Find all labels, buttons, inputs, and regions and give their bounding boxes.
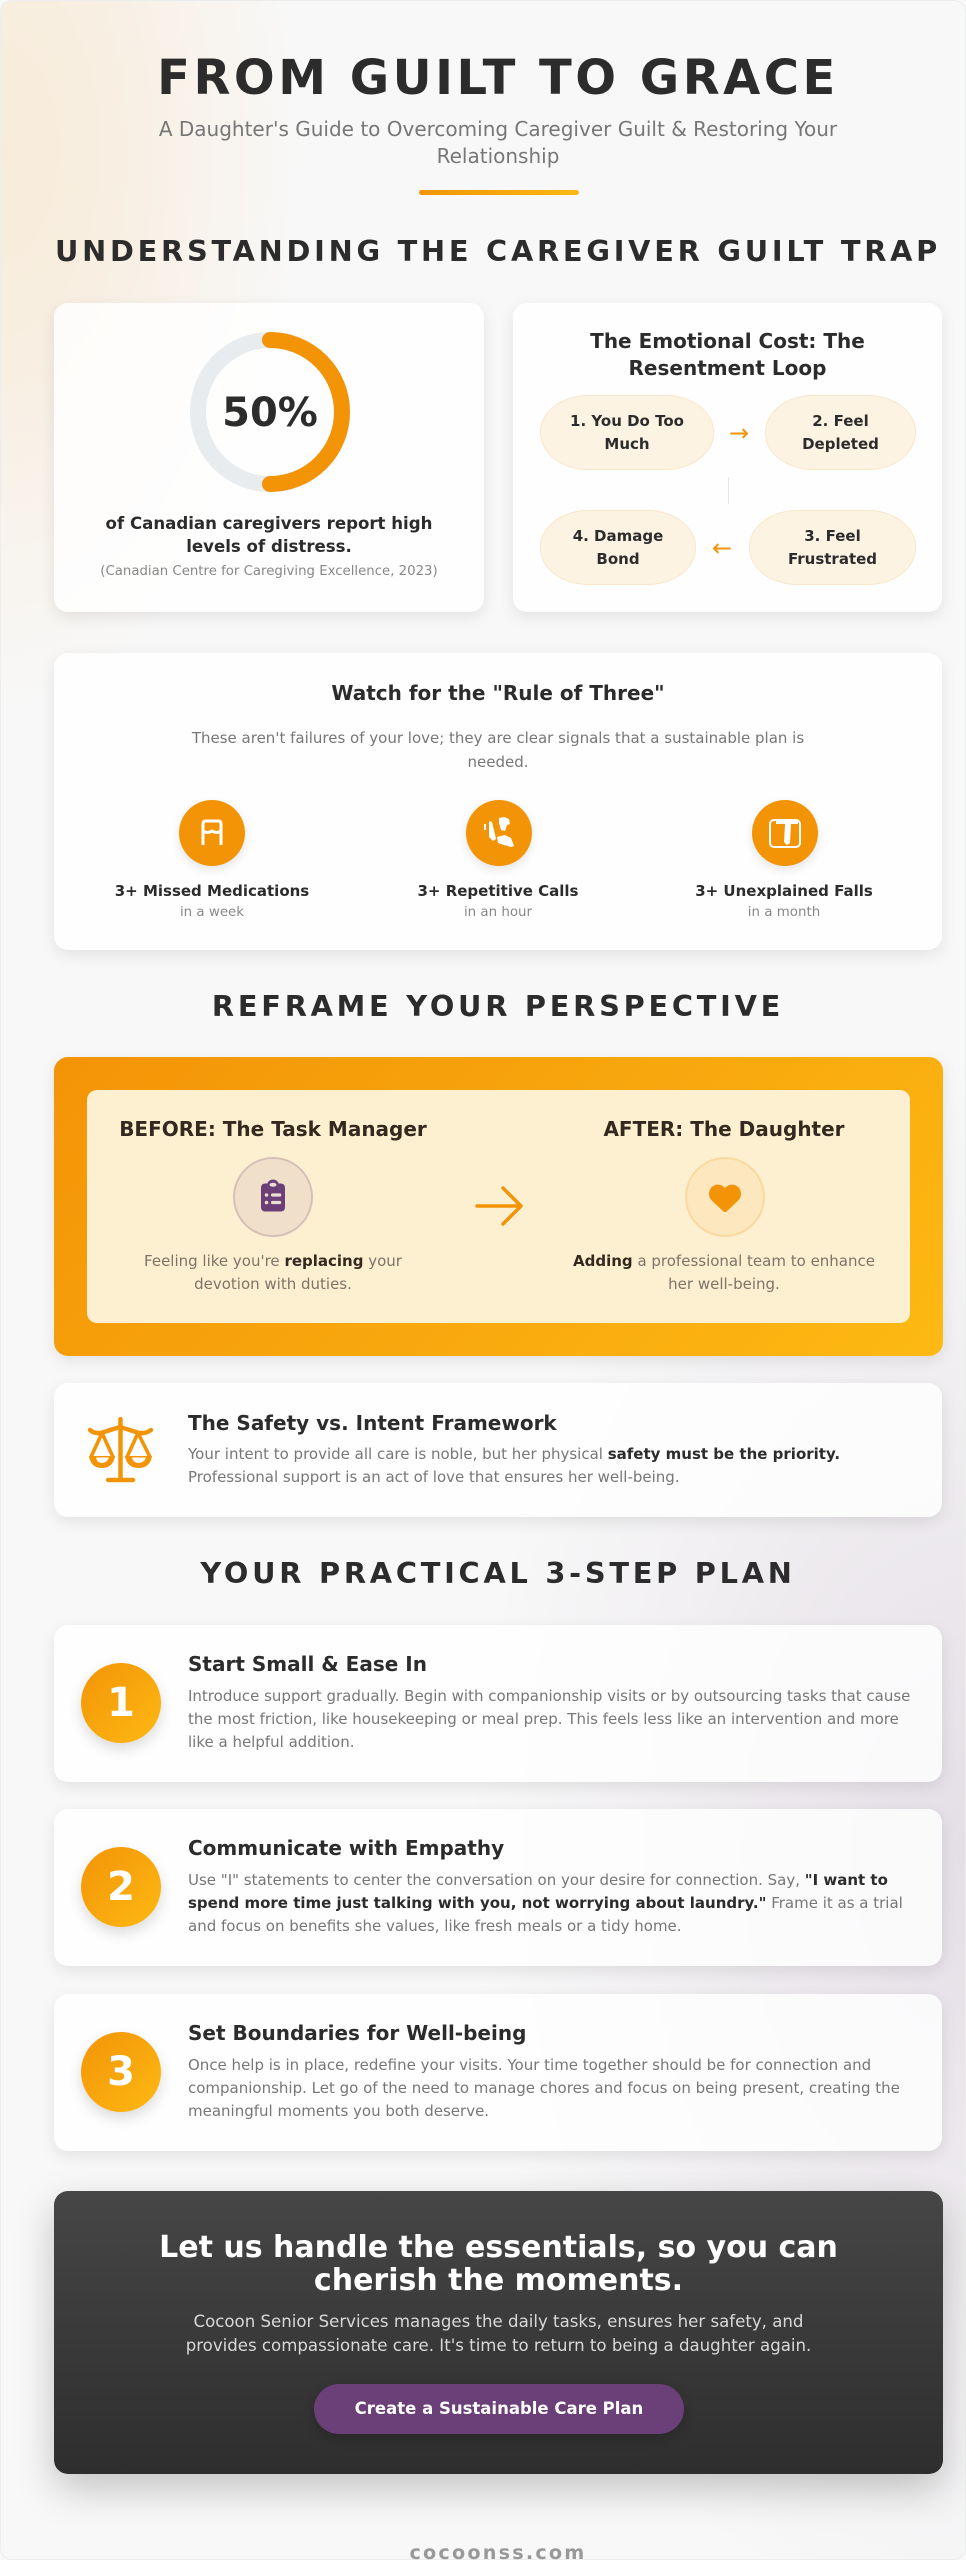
step 1 text: Introduce support gradually. Begin with companionship visits or by outsourcing tasks that cause xyxy=(188,1687,910,1705)
inner comparison box xyxy=(87,1090,910,1323)
rule description: needed. xyxy=(467,753,528,771)
heading: reframe your perspective: REFRAME YOUR PERSPECTIVE xyxy=(212,989,784,1023)
cta description xyxy=(186,2312,811,2354)
title: FROM GUILT TO GRACE xyxy=(157,50,839,106)
loop heading xyxy=(590,329,865,380)
panel: call to action xyxy=(54,2191,943,2474)
cta description: Cocoon Senior Services manages the daily tasks, ensures her safety, and xyxy=(194,2312,803,2331)
step 1 heading: Start Small & Ease In xyxy=(188,1652,427,1676)
node 2: Depleted xyxy=(802,435,879,453)
node 4: Bond xyxy=(596,550,640,568)
connector xyxy=(728,477,729,504)
after heading: AFTER: The Daughter xyxy=(603,1117,845,1141)
loop heading: Resentment Loop xyxy=(629,356,826,380)
safety description: Your intent to provide all care is noble, but her physical safety must be the priority. xyxy=(188,1445,840,1463)
icon: heart xyxy=(685,1157,765,1237)
rule description: These aren't failures of your love; they are clear signals that a sustainable plan is xyxy=(192,729,804,747)
panel: before and after xyxy=(54,1057,943,1356)
label: repetitive calls: 3+ Repetitive Calls xyxy=(417,882,578,900)
donut chart: 50% xyxy=(222,390,318,436)
node 1 xyxy=(540,395,714,470)
sublabel: in a week: in a week xyxy=(180,905,244,920)
step 1 text xyxy=(188,1687,910,1751)
cta button: Create a Sustainable Care Plan xyxy=(355,2399,643,2418)
after description xyxy=(573,1252,875,1293)
donut chart xyxy=(190,332,350,492)
cta description: provides compassionate care. It's time to return to being a daughter again. xyxy=(186,2336,811,2354)
statistic caption: levels of distress. xyxy=(186,537,352,556)
sublabel: in an hour: in an hour xyxy=(464,905,532,920)
step 3 text: meaningful moments you both deserve. xyxy=(188,2102,489,2120)
subtitle xyxy=(159,117,838,168)
subtitle: A Daughter's Guide to Overcoming Caregiver Guilt & Restoring Your xyxy=(159,117,837,141)
after description: her well-being. xyxy=(668,1275,780,1293)
step number 1 xyxy=(81,1663,161,1743)
node 3 xyxy=(749,510,916,585)
heading: your practical 3-step plan: YOUR PRACTICAL 3-STEP PLAN xyxy=(200,1556,796,1590)
step 2 text xyxy=(188,1871,903,1935)
before description xyxy=(144,1252,402,1293)
step 3 text: Once help is in place, redefine your visits. Your time together should be for connection and xyxy=(188,2056,871,2074)
loop heading: The Emotional Cost: The xyxy=(590,329,865,353)
panel: rule of three xyxy=(54,653,942,950)
safety heading: The Safety vs. Intent Framework xyxy=(188,1411,557,1435)
statistic caption: of Canadian caregivers report high xyxy=(106,514,432,533)
before heading: BEFORE: The Task Manager xyxy=(119,1117,427,1141)
step 1 text: like a helpful addition. xyxy=(188,1733,354,1751)
panel: resentment loop xyxy=(513,303,942,612)
node 3: Frustrated xyxy=(788,550,877,568)
before description: Feeling like you're replacing your xyxy=(144,1252,402,1270)
node 2 xyxy=(765,395,916,470)
step 3 heading: Set Boundaries for Well-being xyxy=(188,2021,526,2045)
before description: devotion with duties. xyxy=(194,1275,352,1293)
cta heading: Let us handle the essentials, so you can xyxy=(159,2230,838,2265)
statistic caption xyxy=(106,514,432,556)
arrow: before to after xyxy=(475,1186,523,1226)
cta button xyxy=(314,2384,684,2434)
node 1: 1. You Do Too xyxy=(570,412,684,430)
step 3 text: companionship. Let go of the need to manage chores and focus on being present, creating the xyxy=(188,2079,900,2097)
icon: calls xyxy=(466,800,532,866)
node 4: 4. Damage xyxy=(573,527,663,545)
after description: Adding a professional team to enhance xyxy=(573,1252,875,1270)
step 2 text: spend more time just talking with you, not worrying about laundry." Frame it as a trial xyxy=(188,1894,903,1912)
step number 3 xyxy=(81,2032,161,2112)
node 2: 2. Feel xyxy=(812,412,869,430)
cta heading xyxy=(159,2230,838,2298)
panel: 50% statistic xyxy=(54,303,484,612)
arrow left: ← xyxy=(712,534,732,562)
node 3: 3. Feel xyxy=(804,527,861,545)
panel: step 3 xyxy=(54,1994,942,2151)
sublabel: in a month: in a month xyxy=(748,905,820,920)
icon: medications xyxy=(179,800,245,866)
node 4 xyxy=(540,510,696,585)
panel: step 1 xyxy=(54,1625,942,1782)
step 2 heading: Communicate with Empathy xyxy=(188,1836,504,1860)
subtitle: Relationship xyxy=(437,144,559,168)
step 2 text: and focus on benefits she values, like fresh meals or a tidy home. xyxy=(188,1917,682,1935)
rule description xyxy=(192,729,804,771)
icon: clipboard xyxy=(233,1157,313,1237)
step 1 text: the most friction, like housekeeping or meal prep. This feels less like an intervention and more xyxy=(188,1710,899,1728)
cta heading: cherish the moments. xyxy=(314,2263,683,2298)
step number 3: 3 xyxy=(107,2049,135,2095)
arrow right: → xyxy=(729,419,749,447)
step 3 text xyxy=(188,2056,900,2120)
panel: step 2 xyxy=(54,1809,942,1966)
rule heading: Watch for the "Rule of Three" xyxy=(331,681,665,705)
icon: falls xyxy=(752,800,818,866)
step number 1: 1 xyxy=(107,1680,135,1726)
safety description: Professional support is an act of love that ensures her well-being. xyxy=(188,1468,680,1486)
step 2 text: Use "I" statements to center the conversation on your desire for connection. Say, "I want to xyxy=(188,1871,888,1889)
title underline xyxy=(419,190,579,195)
heading: understanding the caregiver guilt trap: UNDERSTANDING THE CAREGIVER GUILT TRAP xyxy=(55,234,941,268)
label: unexplained falls: 3+ Unexplained Falls xyxy=(695,882,873,900)
step number 2 xyxy=(81,1847,161,1927)
panel: safety vs intent xyxy=(54,1383,942,1517)
icon: balance scale xyxy=(88,1417,153,1482)
label: missed medications: 3+ Missed Medications xyxy=(115,882,309,900)
safety description xyxy=(188,1445,840,1486)
step number 2: 2 xyxy=(107,1864,135,1910)
source note: (Canadian Centre for Caregiving Excellence, 2023) xyxy=(100,564,438,579)
node 1: Much xyxy=(604,435,650,453)
